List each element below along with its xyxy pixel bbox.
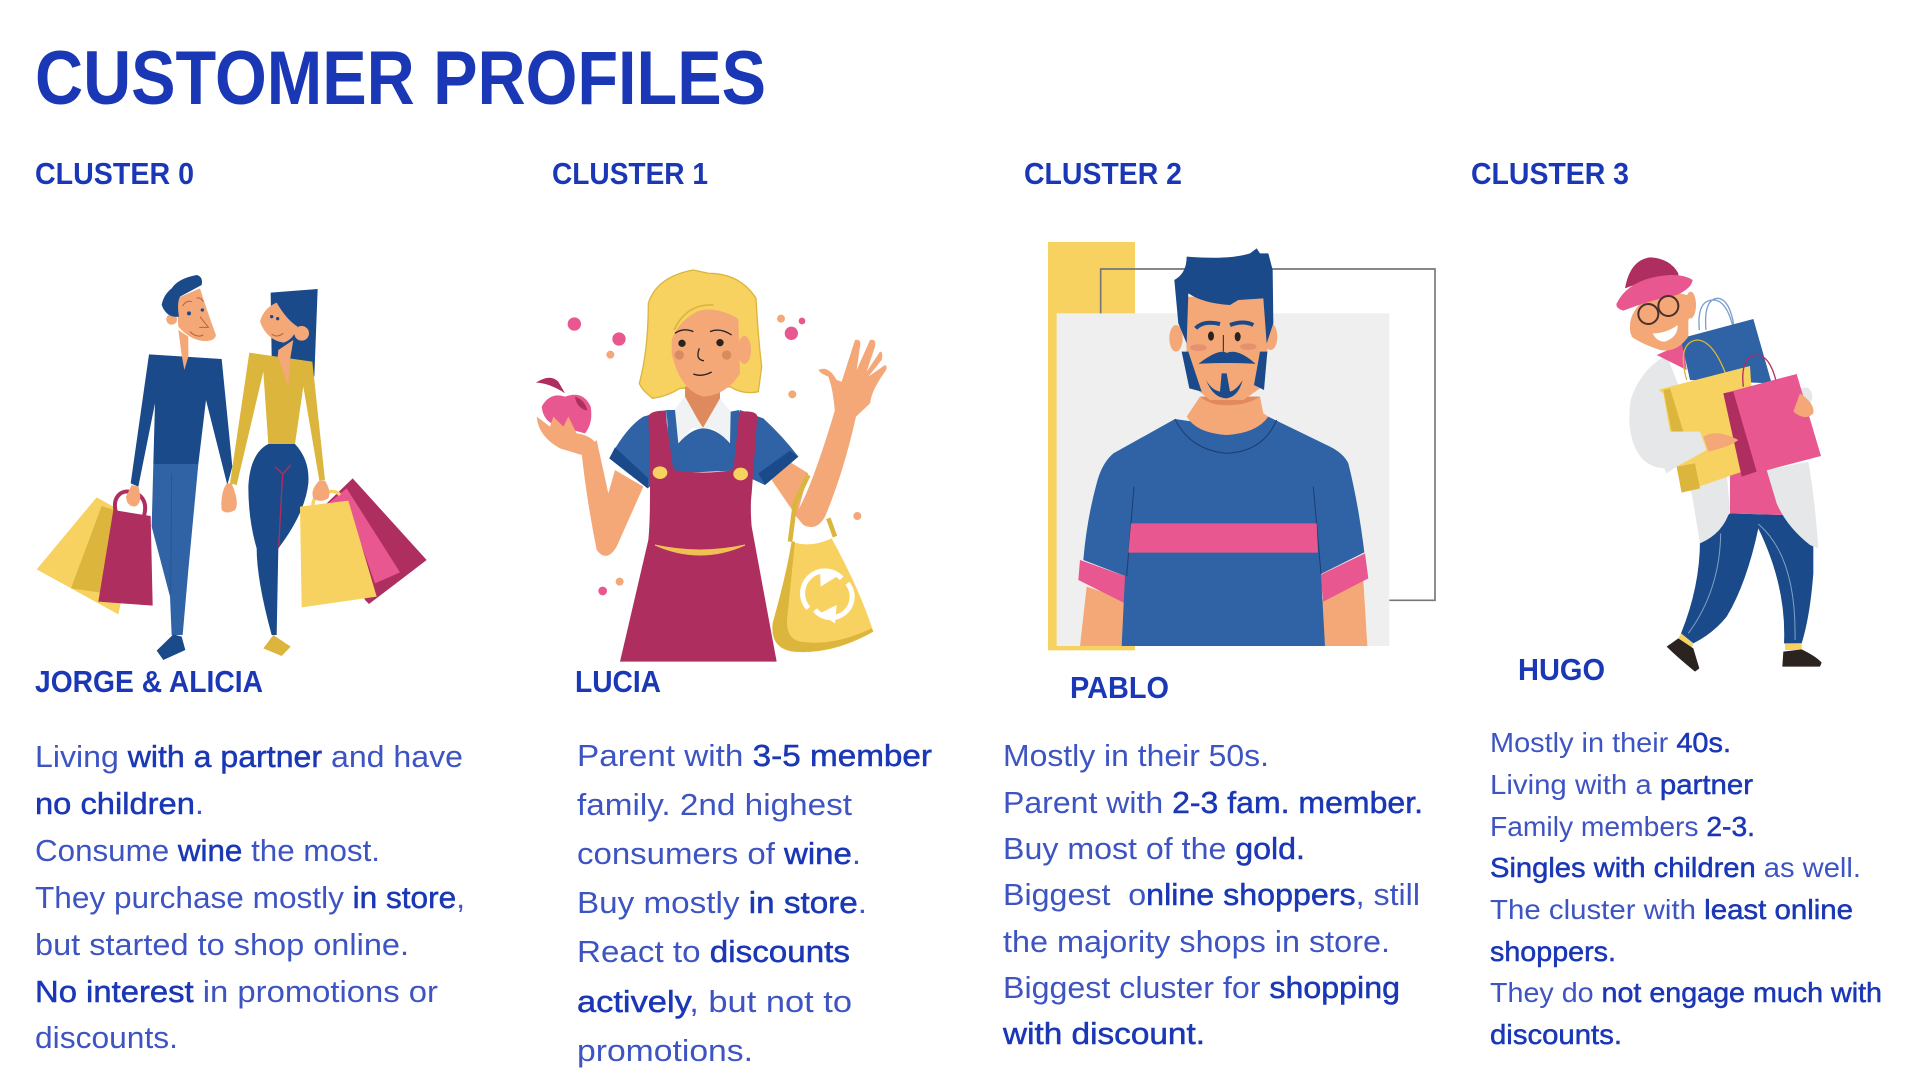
description: cluster 3 bbox=[1490, 727, 1882, 1050]
description: cluster 1: Parent with 3-5 member bbox=[577, 738, 932, 773]
description: cluster 0: no children . bbox=[35, 786, 204, 821]
panel: cluster 3 bbox=[1471, 156, 1882, 1050]
panel: cluster 2 bbox=[1002, 156, 1435, 1051]
description: cluster 3: Living with a partner bbox=[1490, 769, 1753, 800]
description: cluster 0: Consume wine the most. bbox=[35, 833, 380, 868]
description: cluster 2: Parent with 2-3 fam. member. bbox=[1003, 785, 1423, 820]
description: cluster 0: No interest in promotions or bbox=[35, 974, 438, 1009]
description: cluster 0: but started to shop online. bbox=[35, 927, 409, 962]
description: cluster 3: The cluster with least online bbox=[1490, 894, 1853, 925]
illustration: Lucia with apple and bag bbox=[536, 270, 887, 662]
name: Hugo: HUGO bbox=[1518, 652, 1605, 687]
heading: cluster 0: CLUSTER 0 bbox=[35, 156, 194, 191]
illustration: Hugo carrying bags bbox=[1616, 257, 1822, 672]
heading: cluster 2: CLUSTER 2 bbox=[1024, 156, 1182, 191]
description: cluster 1: promotions. bbox=[577, 1033, 753, 1068]
description: cluster 2: Biggest cluster for shopping bbox=[1003, 970, 1400, 1005]
description: cluster 2: Buy most of the gold. bbox=[1003, 831, 1305, 866]
name: Lucia: LUCIA bbox=[575, 664, 661, 699]
description: cluster 1: Buy mostly in store. bbox=[577, 885, 867, 920]
description: cluster 0: Living with a partner and have bbox=[35, 739, 463, 774]
description: cluster 1: actively , but not to bbox=[577, 984, 852, 1019]
description: cluster 3: discounts. bbox=[1490, 1019, 1622, 1050]
description: cluster 3: Family members 2-3. bbox=[1490, 811, 1755, 842]
illustration: couple with shopping bags bbox=[37, 275, 427, 660]
title: CUSTOMER PROFILES bbox=[35, 36, 766, 121]
heading: cluster 1: CLUSTER 1 bbox=[552, 156, 708, 191]
description: cluster 2 bbox=[1002, 738, 1423, 1051]
name: Pablo: PABLO bbox=[1070, 670, 1169, 705]
panel: cluster 0 bbox=[35, 156, 465, 1055]
description: cluster 2: with discount. bbox=[1002, 1016, 1205, 1051]
description: cluster 2: Mostly in their 50s. bbox=[1003, 738, 1269, 773]
name: Jorge and Alicia: JORGE & ALICIA bbox=[35, 664, 263, 699]
panel: cluster 1 bbox=[536, 156, 932, 1068]
heading: cluster 3: CLUSTER 3 bbox=[1471, 156, 1629, 191]
description: cluster 0: discounts. bbox=[35, 1020, 178, 1055]
illustration: Pablo portrait bbox=[1048, 242, 1435, 650]
description: cluster 2: the majority shops in store. bbox=[1003, 924, 1390, 959]
description: cluster 1: consumers of wine. bbox=[577, 836, 861, 871]
description: cluster 3: shoppers. bbox=[1490, 936, 1616, 967]
description: cluster 3: They do not engage much with bbox=[1490, 977, 1882, 1008]
description: cluster 3: Singles with children as well. bbox=[1490, 852, 1861, 883]
description: cluster 0 bbox=[35, 739, 465, 1055]
description: cluster 3: Mostly in their 40s. bbox=[1490, 727, 1731, 758]
description: cluster 1: React to discounts bbox=[577, 934, 850, 969]
description: cluster 1: family. 2nd highest bbox=[577, 787, 852, 822]
description: cluster 1 bbox=[577, 738, 932, 1068]
description: cluster 0: They purchase mostly in store, bbox=[35, 880, 465, 915]
description: cluster 2: Biggest online shoppers , still bbox=[1003, 877, 1420, 912]
